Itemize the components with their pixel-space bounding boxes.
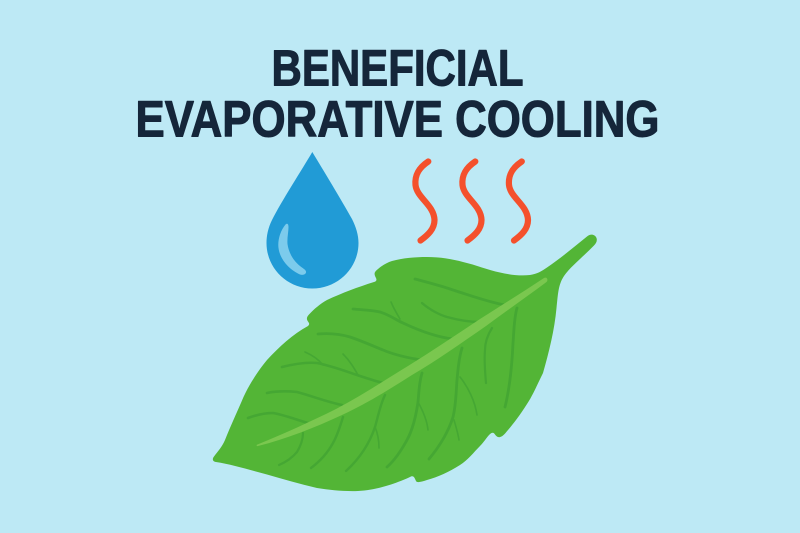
icon: heat waves: [415, 162, 528, 240]
icon: green leaf: [213, 235, 597, 491]
leaf blade: [213, 235, 597, 491]
title: [136, 40, 660, 148]
side veins: [248, 279, 517, 471]
title: BENEFICIAL: [272, 40, 524, 96]
icon: water drop: [266, 152, 358, 288]
midrib: [257, 278, 547, 446]
title: EVAPORATIVE COOLING: [136, 90, 660, 148]
